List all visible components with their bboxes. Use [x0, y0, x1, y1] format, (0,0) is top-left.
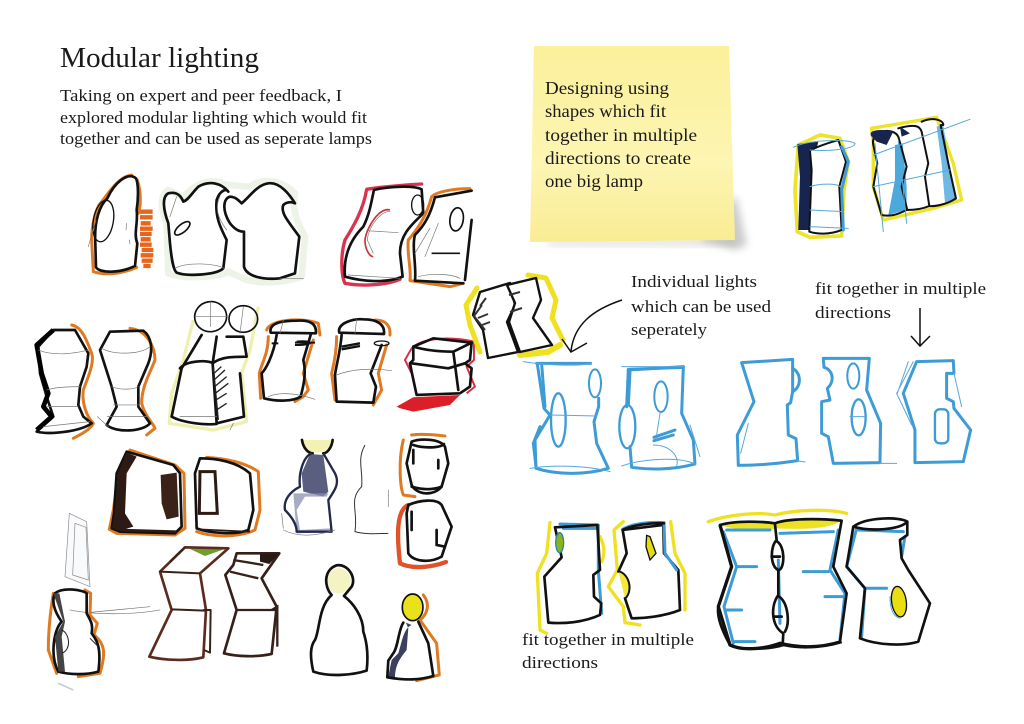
sketch: bulbous hatched lamp	[48, 589, 104, 690]
sketch: yellow and blue lamp pair	[537, 522, 685, 633]
sketch: yellow zigzag lamps	[466, 275, 563, 358]
sketches: blue lamps	[523, 358, 971, 649]
sketches: left column, rows 3 and 4	[48, 434, 452, 690]
sketch: lamp with orange hatching	[88, 175, 153, 274]
sketch: blue profile three	[737, 359, 805, 465]
arrow: down	[911, 308, 930, 346]
sketch: thin line profile	[354, 445, 388, 534]
annotation: fit together, top right	[815, 279, 986, 322]
sketch: brown zigzag lamp with green top	[149, 547, 229, 660]
sticky note text: Designing using	[545, 78, 669, 98]
sketch: curved table line	[70, 607, 160, 614]
sketch: stacked lamps with orange edge	[398, 434, 452, 567]
sticky note text: shapes which fit	[545, 101, 666, 121]
title: Modular lighting	[60, 43, 259, 74]
annotation: fit together, bottom	[522, 630, 694, 672]
sketch: dark brown lamp with panel	[109, 450, 185, 535]
sketch: plain figure with pale bulb	[311, 565, 367, 675]
arrow: curved to lamp	[562, 300, 622, 352]
annotation: fit together, top right: directions	[815, 303, 891, 322]
sketch: blue lamp two	[619, 367, 700, 469]
annotation: individual lights: seperately	[631, 320, 708, 339]
sketch: pale yellow pair with round heads	[169, 299, 258, 430]
intro text: explored modular lighting which would fit	[60, 108, 367, 127]
sketches: top right blue lamps	[793, 117, 970, 237]
sketch: vase form with dark shading	[37, 325, 93, 438]
sketch: two interlocking lamps	[162, 181, 305, 282]
sketch: small figure with yellow bulb	[387, 594, 439, 681]
sketch: thin window outline	[65, 513, 90, 587]
sketch: red block lamp	[397, 338, 475, 412]
sketch: capped lamp two	[332, 319, 392, 405]
sketch: lamp with rectangular opening	[195, 457, 260, 536]
annotation: fit together, bottom: fit together in multiple	[522, 630, 694, 649]
annotation: individual lights: which can be used	[631, 297, 772, 316]
intro text: Taking on expert and peer feedback, I	[60, 86, 342, 105]
annotation: fit together, top right: fit together in multiple	[815, 279, 986, 298]
annotation: fit together, bottom: directions	[522, 653, 598, 672]
sketch: blue profile five	[897, 361, 971, 463]
sketch: blue lamp one	[523, 362, 610, 473]
annotation: individual lights: Individual lights	[631, 272, 757, 291]
annotation: individual lights	[631, 272, 772, 339]
sketch: navy shaded figure	[282, 440, 337, 535]
sticky note text	[545, 78, 697, 191]
sketch: second zigzag lamp	[224, 553, 279, 656]
sketch: capped lamp one	[259, 320, 320, 402]
intro text	[60, 86, 372, 148]
sketches: left column, rows 1 and 2	[37, 175, 475, 438]
sketch: blue profile four	[822, 358, 897, 463]
sticky note text: directions to create	[545, 148, 691, 168]
sketch: red and orange lamp pair	[342, 184, 472, 287]
sketch: bold black and blue pair	[708, 510, 847, 649]
intro text: together and can be used as seperate lamps	[60, 129, 372, 148]
sketch: blue lamp with yellow hole	[847, 518, 930, 645]
sticky note text: one big lamp	[545, 171, 643, 191]
sketch: vase form with orange edge	[97, 328, 155, 435]
sticky note text: together in multiple	[545, 125, 697, 145]
sticky note	[530, 46, 747, 250]
